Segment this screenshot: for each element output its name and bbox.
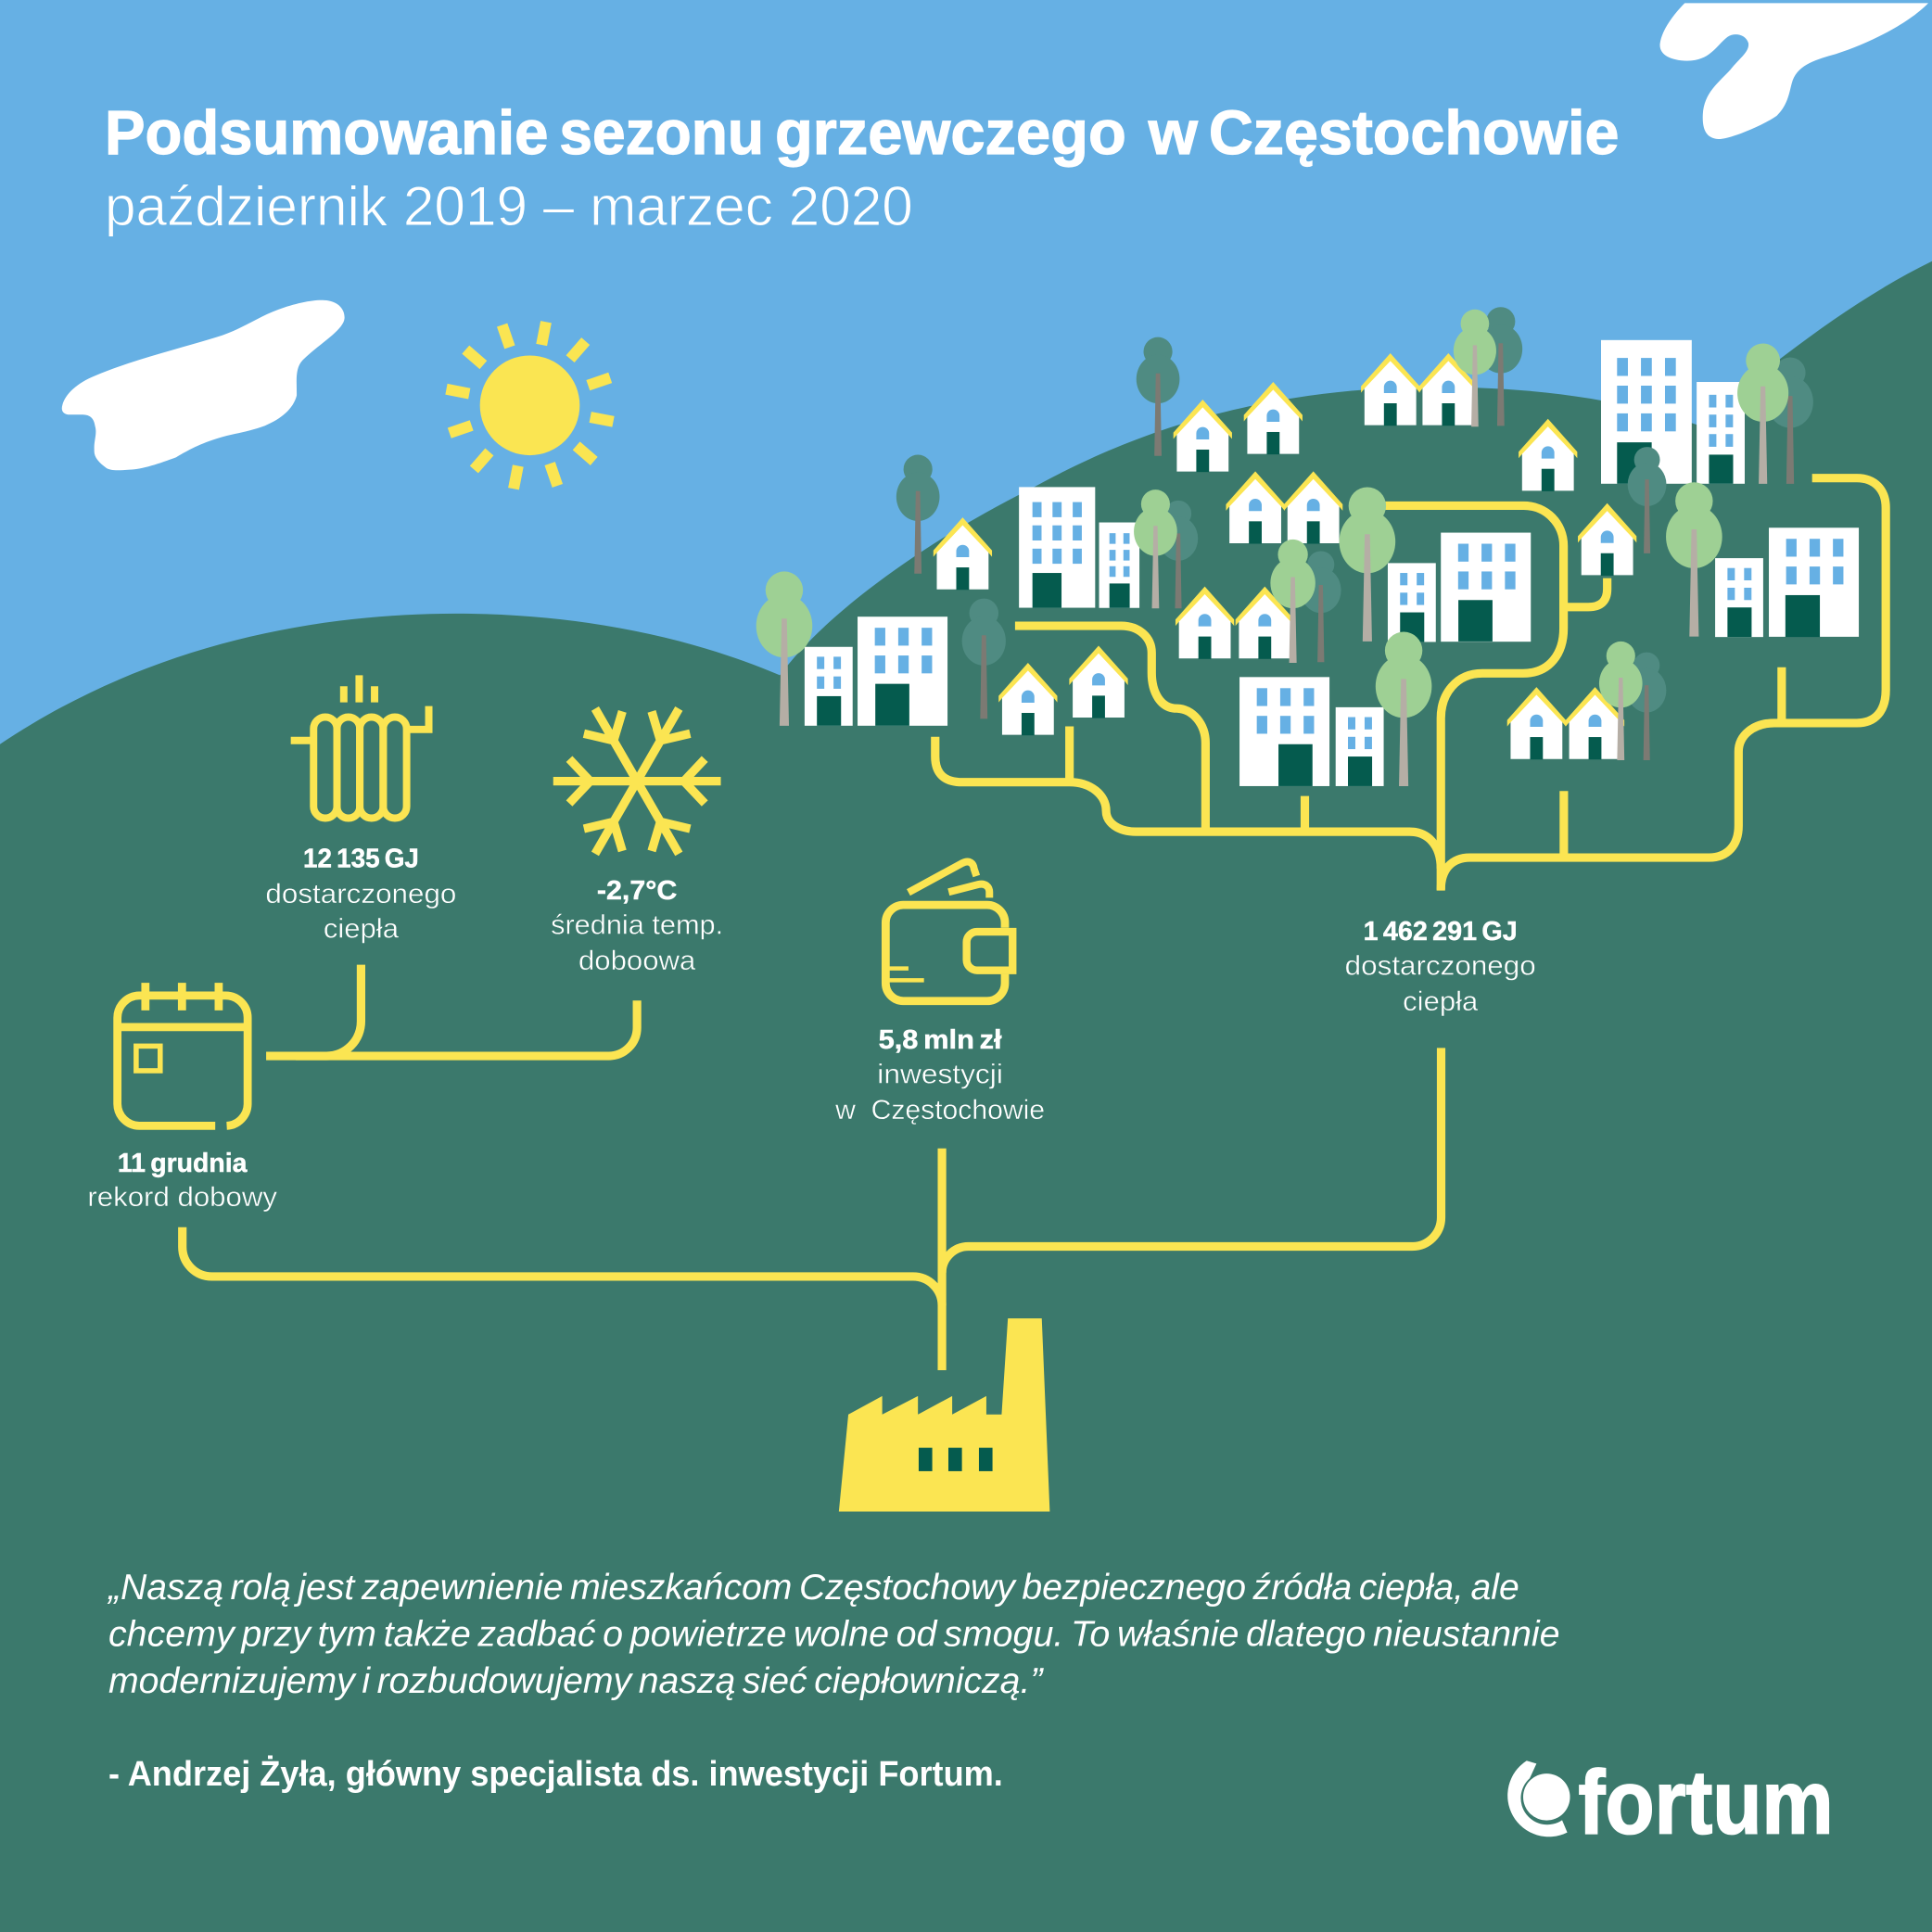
label: average temperature [551, 876, 723, 976]
icon: radiator [291, 675, 429, 819]
quote: „Naszą rolą jest zapewnienie mieszkańcom Częstochowy bezpiecznego źródła ciepła, ale [107, 1568, 1519, 1608]
apartment cluster centre bottom [1239, 677, 1384, 786]
label: total heat: ciepła [1403, 987, 1479, 1017]
town heat network pipes [935, 478, 1886, 891]
label: radiator heat: ciepła [324, 914, 400, 944]
label: investment: w Częstochowie [834, 1096, 1045, 1125]
label: record day [87, 1149, 277, 1213]
title: Częstochowie [1209, 99, 1619, 168]
town buildings [805, 340, 1859, 786]
pipes linking calendar, radiator and temperature [266, 965, 637, 1056]
logo: fortum: fortum [1579, 1752, 1834, 1853]
label: total heat: 1 462 291 GJ [1364, 917, 1518, 947]
subtitle: październik 2019 – marzec 2020 [105, 174, 913, 237]
label: radiator heat: dostarczonego [265, 880, 456, 909]
label: investment: 5,8 mln zł [879, 1025, 1002, 1055]
label: record day: 11 grudnia [118, 1149, 248, 1178]
houses [934, 353, 1636, 759]
icon: wallet [885, 862, 1012, 1001]
title [105, 99, 1619, 168]
cloud left [62, 300, 345, 470]
label: record day: rekord dobowy [87, 1183, 277, 1213]
label: total heat [1345, 917, 1536, 1017]
title: sezonu [559, 99, 764, 168]
icon: calendar [117, 983, 248, 1125]
apartment cluster upper left [1019, 487, 1139, 608]
cloud top right [1660, 3, 1928, 139]
title: w [1148, 99, 1198, 168]
apartment cluster right [1715, 527, 1859, 637]
sun [446, 322, 614, 489]
pipes into factory [183, 1048, 1441, 1370]
quote: chcemy przy tym także zadbać o powietrze wolne od smogu. To właśnie dlatego nieustannie [108, 1615, 1560, 1655]
label: average temperature: -2,7°C [597, 876, 677, 906]
label: investment: inwestycji [877, 1060, 1003, 1089]
town trees [756, 307, 1813, 786]
quote [107, 1568, 1560, 1701]
quote: modernizujemy i rozbudowujemy naszą sieć ciepłowniczą.” [108, 1661, 1044, 1701]
icon: factory [839, 1318, 1049, 1512]
label: radiator heat: 12 135 GJ [303, 845, 419, 874]
label: average temperature: doboowa [578, 947, 696, 976]
apartment cluster top right [1601, 340, 1745, 484]
label: radiator heat [265, 845, 456, 944]
quote attribution: - Andrzej Żyła, główny specjalista ds. inwestycji Fortum. [108, 1755, 1003, 1794]
label: total heat: dostarczonego [1345, 951, 1536, 981]
icon: snowflake [553, 697, 721, 865]
label: investment [834, 1025, 1045, 1125]
label: average temperature: średnia temp. [551, 910, 723, 940]
title: Podsumowanie [105, 99, 548, 168]
title: grzewczego [775, 99, 1126, 168]
apartment cluster bottom left [805, 616, 947, 726]
apartment cluster centre right [1388, 533, 1531, 642]
